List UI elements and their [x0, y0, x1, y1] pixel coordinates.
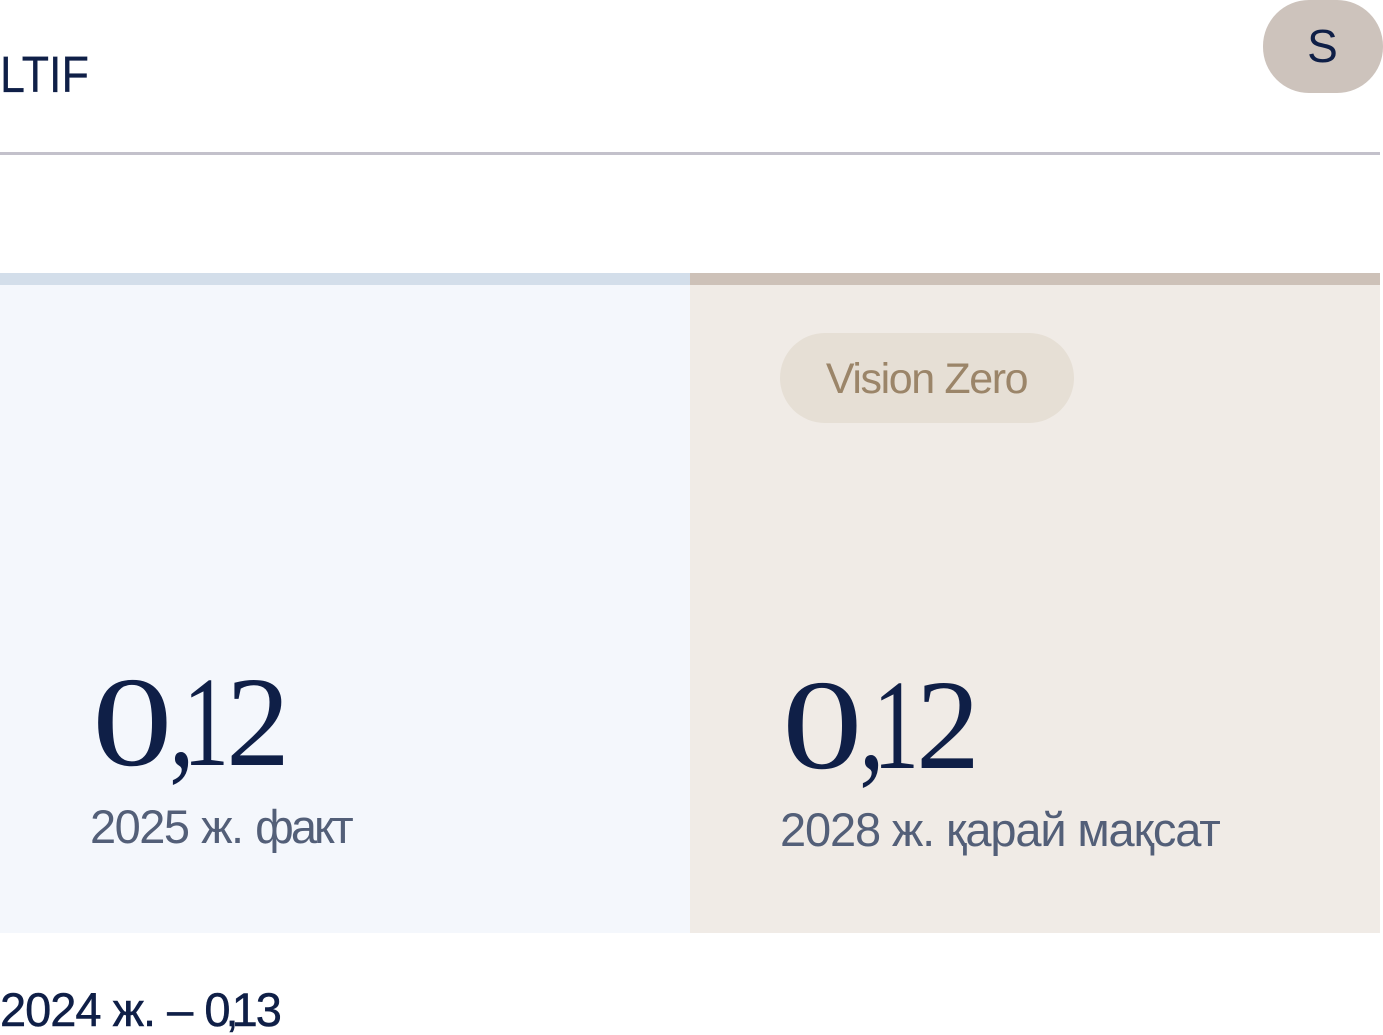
panel top bar: [0, 273, 690, 285]
value: 2: [226, 651, 290, 793]
panel: 2025 fact: [0, 273, 690, 933]
badge: S: S: [1307, 20, 1338, 72]
pill: Vision Zero: [780, 333, 1074, 423]
value: 0: [782, 654, 863, 796]
caption: 2028 ж. қарай мақсат: [780, 803, 1220, 856]
value: ,: [169, 651, 195, 793]
pill: Vision Zero: Vision Zero: [826, 355, 1027, 403]
value: 1: [873, 654, 919, 796]
badge: S: [1263, 0, 1383, 93]
title: LTIF: [0, 46, 89, 103]
caption: 2025 ж. факт: [90, 800, 351, 853]
panel: 2028 target: [690, 273, 1380, 933]
footnote: 2024 ж. – 0,13: [0, 983, 280, 1035]
divider: [0, 152, 1380, 155]
value: ,: [859, 654, 885, 796]
value: 2: [916, 654, 980, 796]
value: [782, 654, 980, 796]
value: 0: [92, 651, 173, 793]
value: [92, 651, 290, 793]
panel top bar: [690, 273, 1380, 285]
value: 1: [183, 651, 229, 793]
